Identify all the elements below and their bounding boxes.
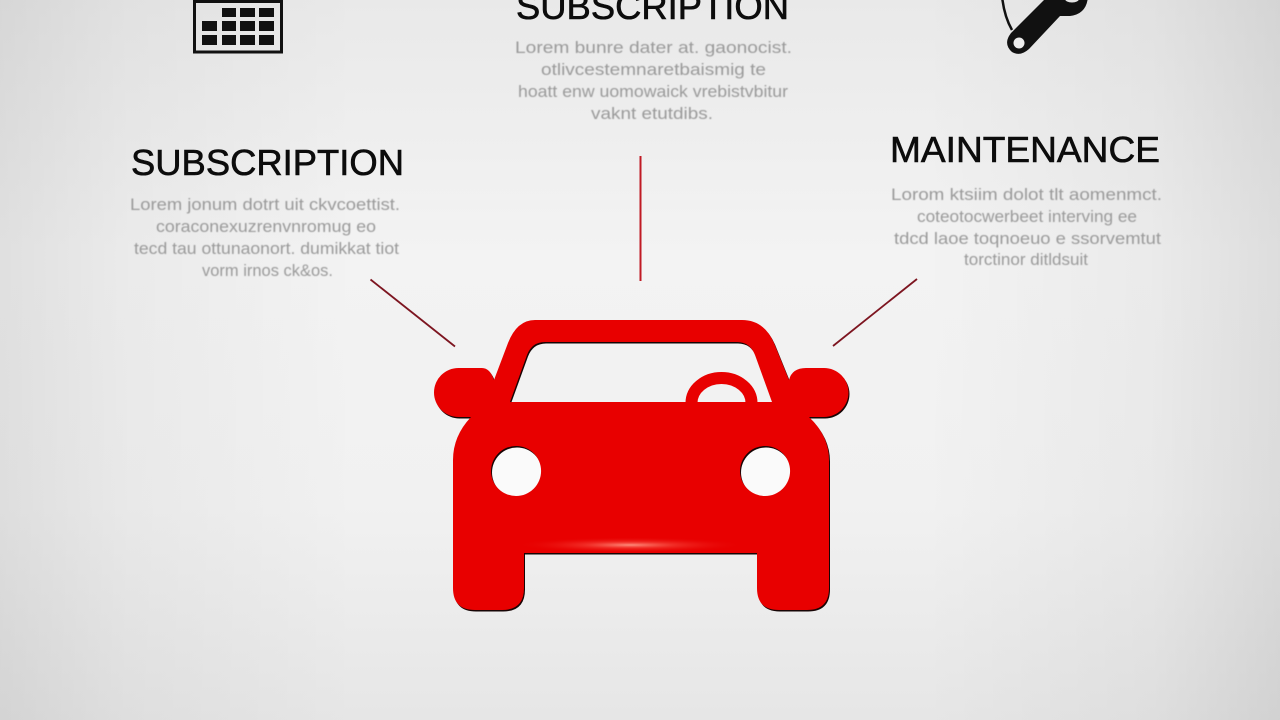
text block: right description bbox=[891, 185, 1162, 269]
text block: left description: Lorem jonum dotrt uit ckvcoettist. bbox=[130, 195, 400, 214]
text block: right description: torctinor ditldsuit bbox=[964, 250, 1088, 269]
bumper highlight bbox=[515, 537, 745, 553]
connector: centre line bbox=[640, 156, 642, 281]
text block: left description: tecd tau ottunaonort. dumikkat tiot bbox=[134, 239, 399, 258]
icon: wrench bbox=[1002, 0, 1088, 54]
text block: right description: coteotocwerbeet interving ee bbox=[917, 207, 1137, 226]
headlight fills bbox=[491, 446, 790, 496]
text block: top description: vaknt etutdibs. bbox=[591, 104, 713, 123]
text block: top description bbox=[515, 38, 792, 123]
text block: top description: Lorem bunre dater at. gaonocist. bbox=[515, 38, 792, 57]
steering wheel arc bbox=[692, 378, 752, 403]
connector: right line bbox=[833, 279, 917, 346]
text block: top description: otlivcestemnaretbaismig te bbox=[541, 60, 766, 79]
connector: left line bbox=[370, 280, 455, 346]
car body bbox=[434, 320, 848, 610]
text block: right description: tdcd laoe toqnoeuo e ssorvemtut bbox=[894, 229, 1161, 248]
text block: left description bbox=[130, 195, 400, 280]
text block: left description: vorm irnos ck&os. bbox=[202, 261, 333, 280]
heading: left subscription: SUBSCRIPTION bbox=[131, 142, 404, 183]
heading: maintenance: MAINTENANCE bbox=[890, 129, 1160, 170]
text block: left description: coraconexuzrenvnromug eo bbox=[156, 217, 376, 236]
icon: red car bbox=[434, 320, 850, 612]
text block: top description: hoatt enw uomowaick vrebistvbitur bbox=[518, 82, 788, 101]
text block: right description: Lorom ktsiim dolot tlt aomenmct. bbox=[891, 185, 1162, 204]
icon: calendar bbox=[193, 0, 283, 52]
car shadow bbox=[435, 322, 850, 612]
